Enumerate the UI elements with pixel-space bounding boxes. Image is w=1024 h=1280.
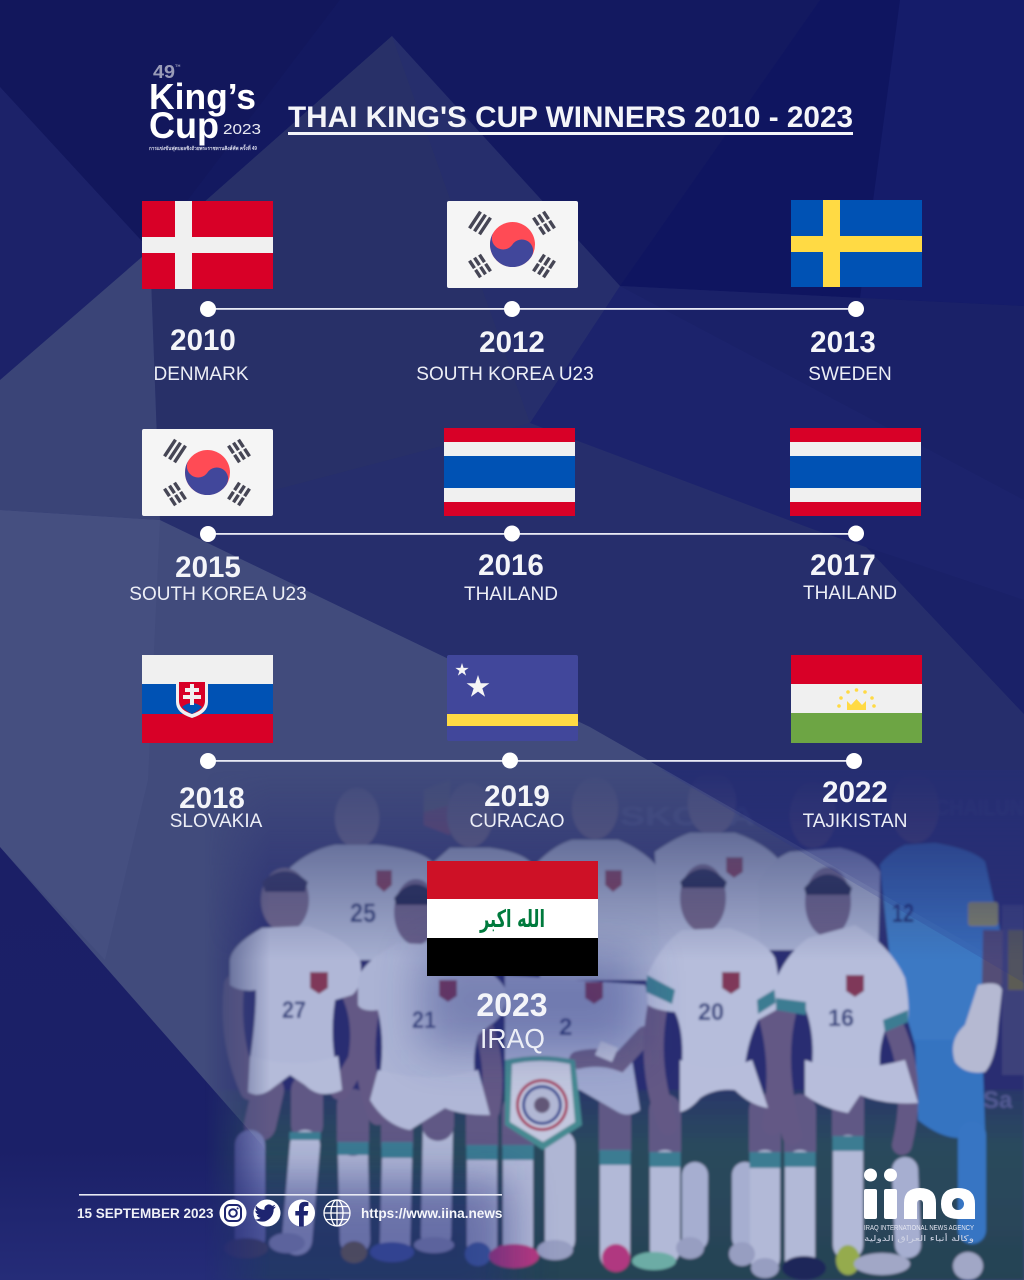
labels: 2018 Slovakia [170, 782, 263, 832]
flag: Thailand 2016 [444, 428, 575, 516]
flag: Denmark [142, 201, 273, 289]
logo: iina [864, 1168, 975, 1243]
flag: Sweden [791, 200, 922, 287]
labels: 2022 Tajikistan [803, 776, 907, 832]
flag: Thailand 2017 [790, 428, 921, 516]
labels: 2023 Iraq: IRAQ [480, 1023, 545, 1054]
labels: 2012 South Korea U23: SOUTH KOREA U23 [416, 364, 594, 385]
photo tint [226, 836, 1024, 1280]
player 27 [230, 868, 361, 1095]
flag: Iraq: الله اكبر [479, 905, 545, 933]
date: 15 SEPTEMBER 2023 [77, 1206, 214, 1221]
icon: facebook [288, 1200, 315, 1226]
labels: 2019 Curacao: CURACAO [469, 811, 565, 832]
labels: 2015 South Korea U23: 2015 [175, 551, 241, 584]
player 27: 27 [282, 997, 306, 1024]
logo: 49th King's Cup 2023: 2023 [223, 121, 261, 138]
pennant [505, 1056, 582, 1150]
timeline row 3 [200, 752, 862, 769]
title: THAI KING'S CUP WINNERS 2010 - 2023 [288, 101, 853, 134]
labels: 2013 Sweden [808, 326, 892, 385]
labels: 2018 Slovakia: SLOVAKIA [170, 811, 263, 832]
labels: 2018 Slovakia: 2018 [179, 782, 245, 815]
labels: 2019 Curacao: 2019 [484, 780, 550, 813]
labels: 2013 Sweden: 2013 [810, 326, 876, 359]
icon: instagram [220, 1200, 246, 1226]
labels: 2012 South Korea U23 [416, 326, 594, 385]
flag: Tajikistan [791, 655, 922, 743]
labels: 2017 Thailand: 2017 [810, 549, 876, 582]
front row players [230, 864, 918, 1145]
logo: 49th King's Cup 2023: การแข่งขันฟุตบอลชิงถ้วยพระราชทานคิงส์คัพ ครั้งที่ 49 [149, 143, 257, 152]
labels: 2010 Denmark [153, 324, 249, 385]
stadium backdrop: Sa [983, 1087, 1013, 1114]
labels: 2017 Thailand: THAILAND [803, 583, 897, 604]
goalkeeper: 12 [892, 898, 914, 928]
labels: 2010 Denmark: DENMARK [153, 364, 249, 385]
logo: 49th King's Cup 2023 [149, 62, 261, 152]
player 16: 16 [828, 1005, 854, 1032]
labels: 2017 Thailand [803, 549, 897, 604]
logo: 49th King's Cup 2023: King’s [149, 76, 256, 117]
logo: 49th King's Cup 2023: 49 [153, 62, 175, 82]
icon: globe [324, 1200, 350, 1226]
labels: 2023 Iraq: 2023 [476, 987, 548, 1023]
flag: Slovakia [142, 655, 273, 743]
team photo [219, 800, 1024, 1280]
labels: 2012 South Korea U23: 2012 [479, 326, 545, 359]
labels: 2015 South Korea U23: SOUTH KOREA U23 [129, 584, 307, 605]
stadium backdrop: SKODA [620, 801, 755, 831]
player 16 [774, 867, 918, 1145]
icon: twitter [254, 1200, 280, 1226]
labels: 2010 Denmark: 2010 [170, 324, 236, 357]
labels: 2015 South Korea U23 [129, 551, 307, 605]
legs and socks [250, 1090, 908, 1262]
timeline row 1 [200, 301, 864, 317]
player 21: 21 [412, 1007, 436, 1034]
player 2: 2 [559, 1014, 572, 1041]
stadium backdrop [218, 806, 1024, 1280]
labels: 2016 Thailand: 2016 [478, 549, 544, 582]
labels: 2016 Thailand: THAILAND [464, 584, 558, 605]
labels: 2016 Thailand [464, 549, 558, 605]
logo: 49th King's Cup 2023: TH [175, 63, 180, 68]
labels: 2022 Tajikistan: 2022 [822, 776, 888, 809]
player 21 [358, 879, 505, 1130]
labels: 2013 Sweden: SWEDEN [808, 364, 892, 385]
player 20 [646, 864, 779, 1125]
labels: 2019 Curacao [469, 780, 565, 832]
flag: South Korea 2015 [142, 429, 273, 516]
player 2 [505, 975, 651, 1115]
back row players [290, 771, 1002, 1230]
footer divider [79, 1194, 502, 1196]
boots [224, 1233, 983, 1280]
url: https://www.iina.news [361, 1206, 502, 1221]
flag: Curacao [447, 655, 578, 741]
logo: 49th King's Cup 2023: Cup [149, 105, 219, 146]
flag: Iraq [427, 861, 598, 976]
labels: 2022 Tajikistan: TAJIKISTAN [803, 811, 907, 832]
logo: iina: IRAQ INTERNATIONAL NEWS AGENCY [864, 1223, 974, 1232]
flag: South Korea 2012 [447, 201, 578, 288]
labels: 2023 Iraq [476, 987, 548, 1054]
facet highlight over photo [662, 770, 1024, 983]
timeline row 2 [200, 526, 864, 542]
back row players: 25 [350, 898, 376, 928]
player 20: 20 [698, 999, 724, 1026]
logo: iina: وكالة أنباء العراق الدولية [864, 1233, 974, 1243]
goalkeeper [880, 773, 1002, 1230]
